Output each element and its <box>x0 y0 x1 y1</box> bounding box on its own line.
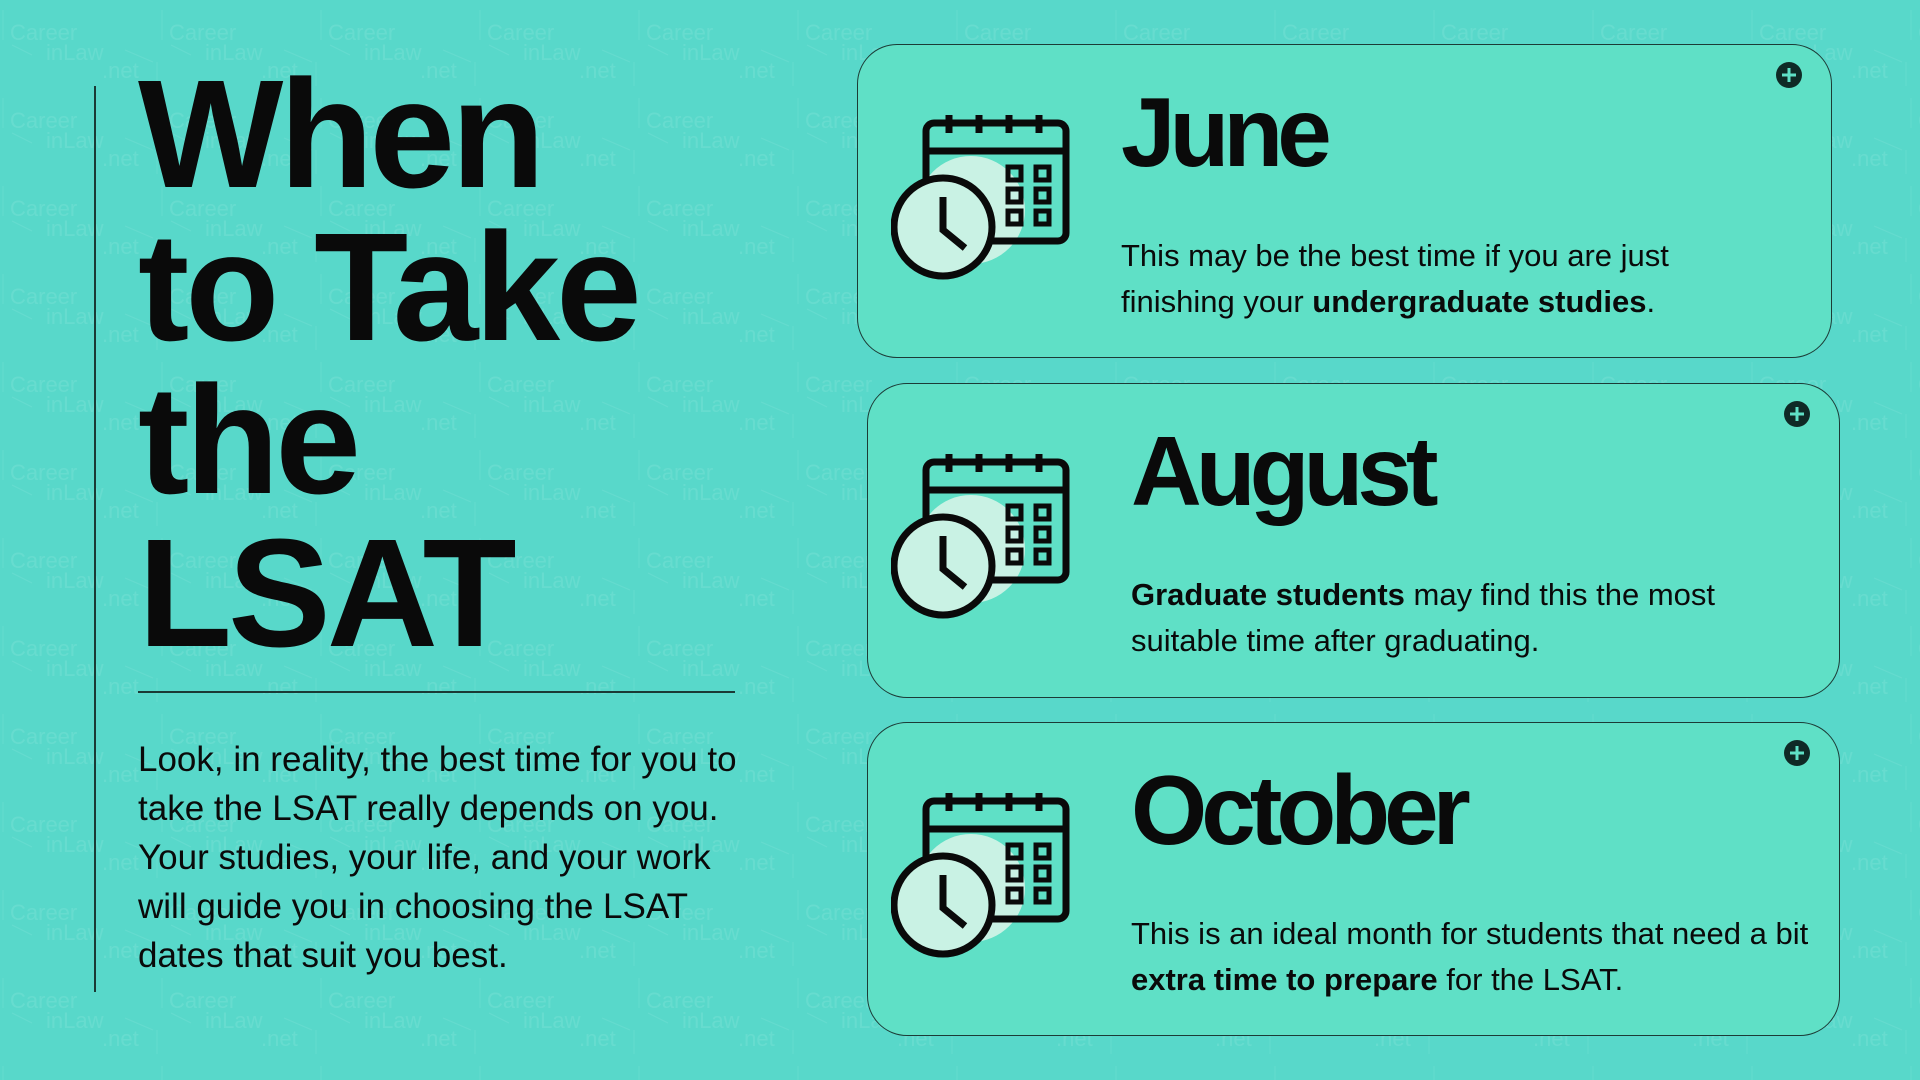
intro paragraph: Look, in reality, the best time for you to <box>138 740 737 779</box>
text <box>1131 916 1808 997</box>
heading: June <box>1121 77 1326 187</box>
intro paragraph: Your studies, your life, and your work <box>138 838 711 877</box>
title: When <box>138 48 541 220</box>
intro paragraph <box>138 740 737 975</box>
icon: calendar clock <box>891 793 1070 958</box>
icon: plus <box>1784 401 1810 427</box>
text <box>1121 238 1669 319</box>
title <box>138 48 638 679</box>
horizontal divider line <box>138 691 735 692</box>
icon: plus <box>1784 740 1810 766</box>
title: LSAT <box>138 507 513 679</box>
vertical divider line <box>94 86 96 992</box>
heading: August <box>1131 416 1432 526</box>
panel: June <box>857 44 1832 358</box>
text: This may be the best time if you are just <box>1121 238 1669 273</box>
panel: October <box>867 722 1840 1036</box>
title: to Take <box>138 201 638 373</box>
text: Graduate students may find this the most <box>1131 577 1715 612</box>
text: suitable time after graduating. <box>1131 623 1539 658</box>
text: finishing your undergraduate studies. <box>1121 284 1655 319</box>
title: the <box>138 354 357 526</box>
intro paragraph: take the LSAT really depends on you. <box>138 789 718 828</box>
intro paragraph: will guide you in choosing the LSAT <box>138 887 688 926</box>
text: extra time to prepare for the LSAT. <box>1131 962 1623 997</box>
text: This is an ideal month for students that need a bit <box>1131 916 1808 951</box>
icon: calendar clock <box>891 454 1070 618</box>
icon: calendar clock <box>891 115 1070 280</box>
panel: August <box>867 383 1840 698</box>
icon: plus <box>1776 62 1802 88</box>
text <box>1131 577 1715 658</box>
intro paragraph: dates that suit you best. <box>138 936 508 975</box>
heading: October <box>1131 755 1465 865</box>
